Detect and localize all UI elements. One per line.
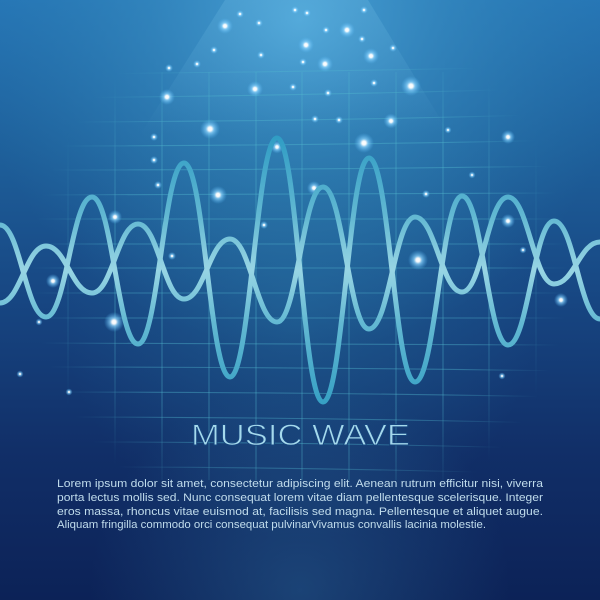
sparkles bbox=[16, 6, 568, 396]
wave curve two bbox=[0, 187, 600, 329]
body text: Aliquam fringilla commodo orci consequat pulvinarVivamus convallis lacinia molestie. bbox=[57, 519, 486, 531]
sound wave curves bbox=[0, 138, 600, 402]
body text bbox=[57, 478, 544, 531]
body text: eros massa, rhoncus vitae euismod at, facilisis sed magna. Pellentesque et aliquet augue. bbox=[57, 506, 543, 518]
wave curve one bbox=[0, 138, 600, 402]
body text: Lorem ipsum dolor sit amet, consectetur adipiscing elit. Aenean rutrum efficitur nisi, viverra bbox=[57, 478, 544, 490]
grid bbox=[30, 67, 570, 480]
body text: porta lectus mollis sed. Nunc consequat lorem vitae diam pellentesque scelerisque. Integer bbox=[57, 492, 543, 504]
spotlight cone bbox=[140, 0, 450, 135]
title: MUSIC WAVE bbox=[191, 419, 410, 452]
